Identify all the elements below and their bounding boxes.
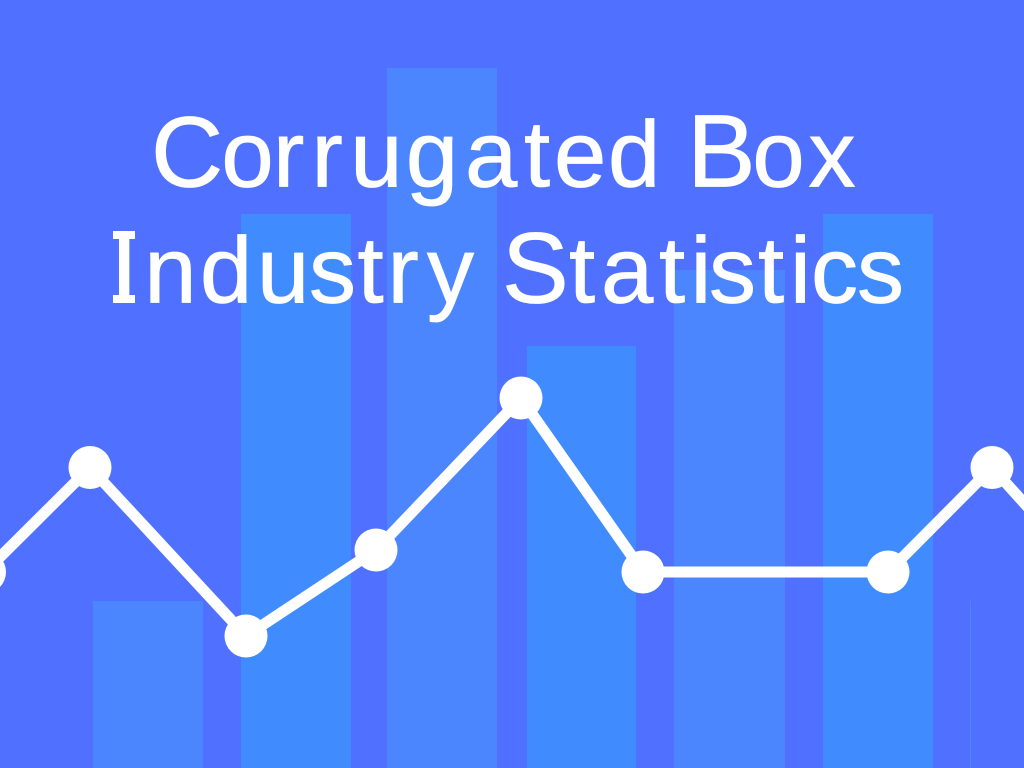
background bar chart [93,68,971,768]
title: C [151,96,223,208]
title: I [110,210,138,324]
line chart [0,376,1024,658]
title: tatistics [569,218,904,322]
title: B [687,94,756,208]
title: S [502,212,569,324]
title: ndustry [144,218,474,322]
title [110,94,904,324]
title: ox [752,102,856,206]
title: orrugated [221,102,660,206]
